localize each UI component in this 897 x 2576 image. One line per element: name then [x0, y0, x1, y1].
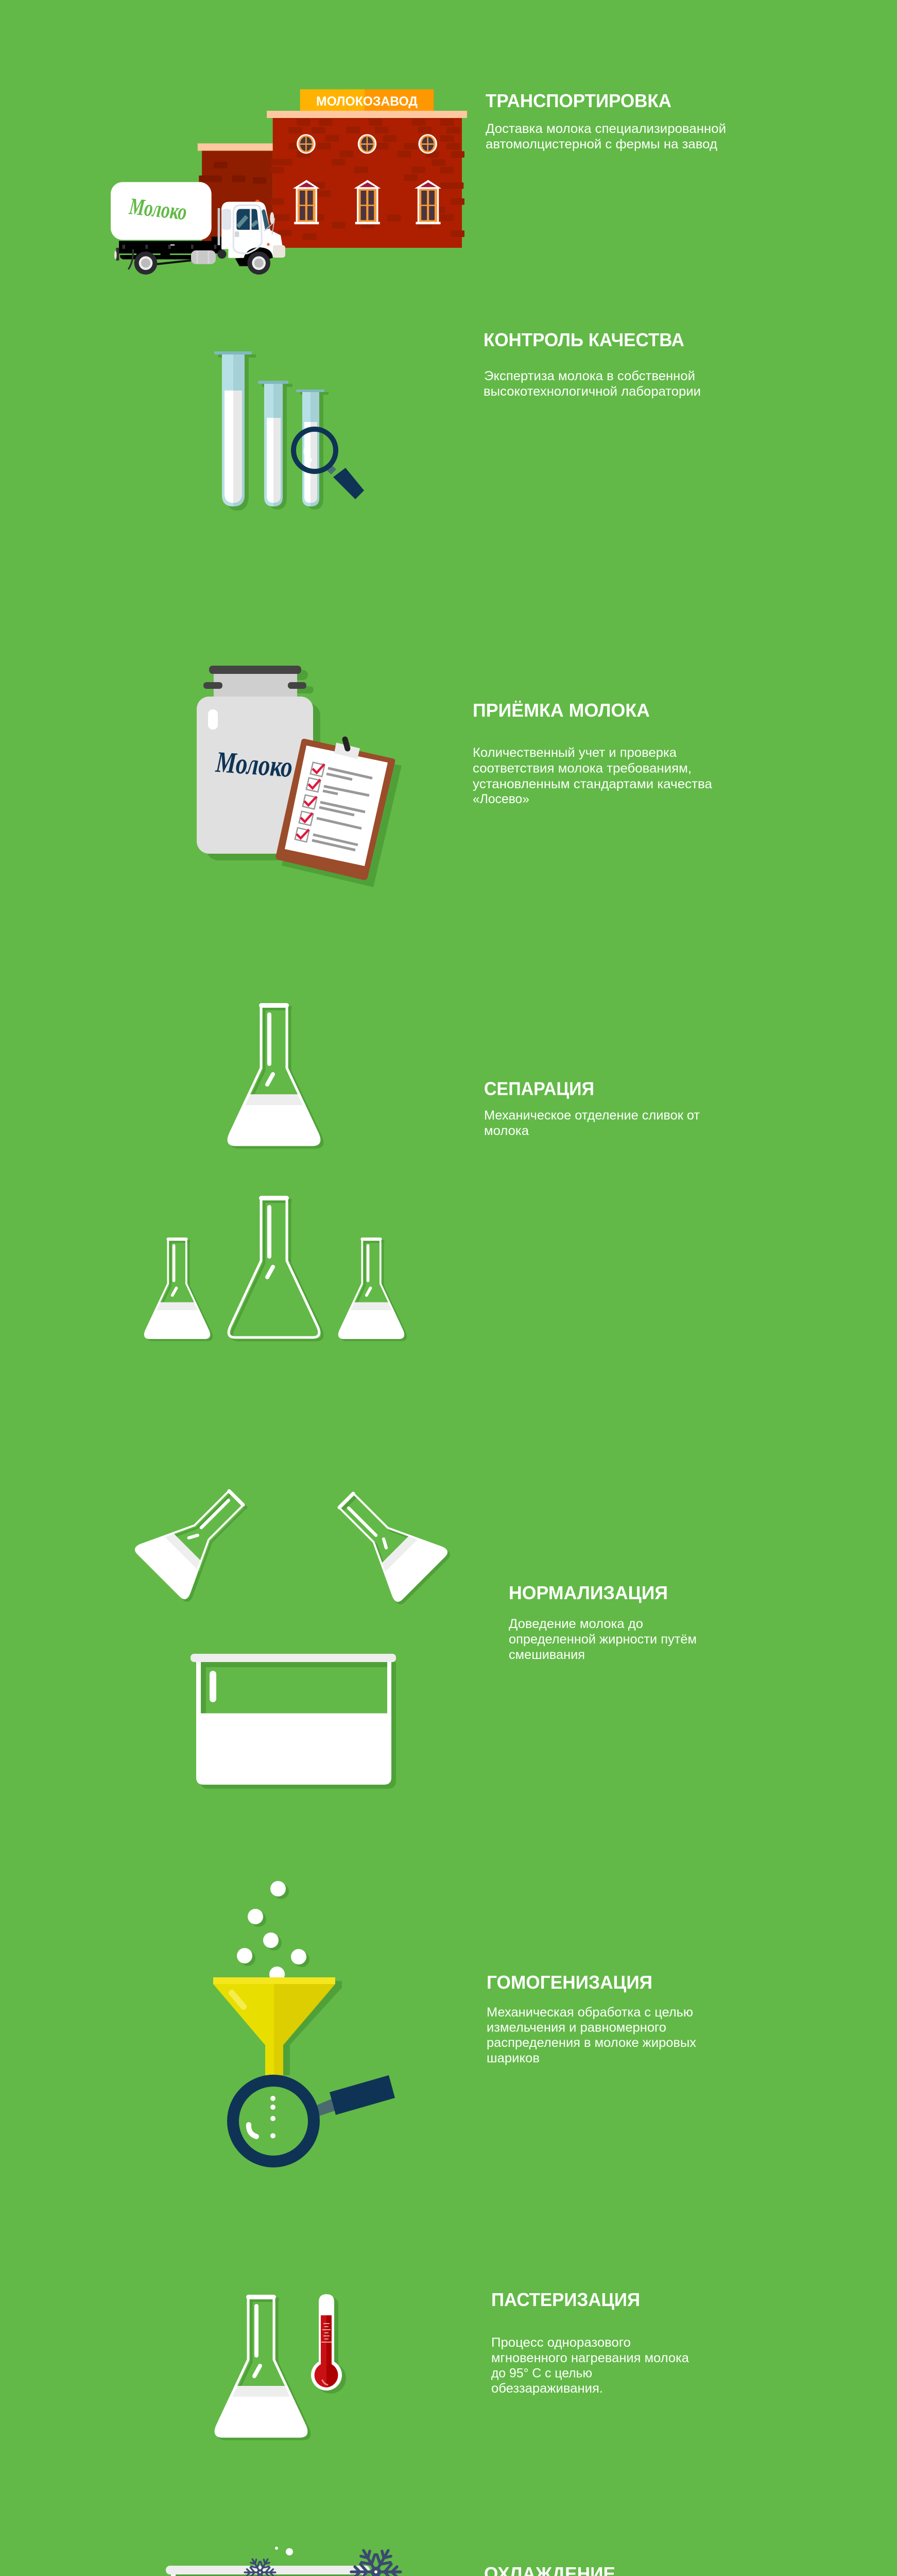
- text block: установленным стандартами качества: [473, 777, 712, 791]
- tube 3: [296, 389, 324, 506]
- text block: мгновенного нагревания молока: [491, 2351, 689, 2365]
- text block: Доведение молока до: [509, 1617, 643, 1631]
- flask: empty: [229, 1196, 322, 1340]
- text block: молока: [484, 1124, 529, 1138]
- text block: высокотехнологичной лаборатории: [484, 384, 701, 399]
- heading: ПРИЁМКА МОЛОКА: [473, 700, 650, 721]
- text block: автомолцистерной с фермы на завод: [486, 137, 717, 151]
- illustration: clipboard with checklist: [276, 739, 402, 887]
- panel: separation: [145, 1003, 700, 1340]
- text block: Механическое отделение сливок от: [484, 1108, 700, 1123]
- panel: transportation: [111, 89, 726, 275]
- heading: ГОМОГЕНИЗАЦИЯ: [487, 1972, 652, 1993]
- text block: «Лосево»: [473, 792, 529, 806]
- flask: small left: [145, 1238, 212, 1340]
- text block: Механическая обработка с целью: [487, 2005, 693, 2020]
- panel: pasteurization: [216, 2289, 689, 2439]
- flask with milk: [216, 2295, 309, 2439]
- flask: tilted left: [134, 1472, 265, 1602]
- flask: small right: [339, 1238, 406, 1340]
- text block: смешивания: [509, 1648, 585, 1662]
- illustration: dairy plant building: [198, 89, 467, 248]
- heading: ПАСТЕРИЗАЦИЯ: [491, 2289, 640, 2310]
- text block: [484, 1108, 700, 1138]
- text block: обеззараживания.: [491, 2381, 603, 2396]
- heading: КОНТРОЛЬ КАЧЕСТВА: [484, 329, 684, 350]
- text block: измельчения и равномерного: [487, 2021, 666, 2035]
- illustration: milk can: [197, 666, 320, 860]
- snow dots: [145, 2547, 396, 2576]
- text block: Процесс одноразового: [491, 2335, 631, 2350]
- text block: [487, 2005, 696, 2065]
- heading: СЕПАРАЦИЯ: [484, 1078, 594, 1099]
- text block: [484, 369, 701, 399]
- beaker: [166, 2566, 370, 2576]
- text block: Количественный учет и проверка: [473, 745, 677, 760]
- snowflakes: [160, 2547, 401, 2576]
- panel: quality control: [214, 329, 701, 511]
- flask: full: [229, 1003, 322, 1147]
- heading: ТРАНСПОРТИРОВКА: [486, 90, 671, 111]
- text block: определенной жирности путём: [509, 1632, 697, 1647]
- text block: шариков: [487, 2051, 540, 2065]
- thermometer: [311, 2294, 346, 2394]
- text block: до 95° С с целью: [491, 2366, 592, 2380]
- truck logo: Молоко: [128, 193, 188, 225]
- text block: распределения в молоке жировых: [487, 2036, 696, 2050]
- can logo: Молоко: [214, 745, 294, 784]
- text block: [473, 745, 712, 806]
- text block: [491, 2335, 689, 2396]
- text block: [509, 1617, 697, 1662]
- text block: Доставка молока специализированной: [486, 122, 726, 136]
- tube 2: [258, 381, 288, 506]
- beaker with milk: [191, 1654, 396, 1789]
- panel: homogenization: [213, 1881, 696, 2162]
- panel: normalization: [134, 1472, 697, 1789]
- shadows: [218, 354, 329, 511]
- funnel: [213, 1977, 342, 2075]
- text block: соответствия молока требованиям,: [473, 761, 692, 776]
- panel: cooling: [145, 2547, 628, 2576]
- heading: НОРМАЛИЗАЦИЯ: [509, 1582, 668, 1603]
- illustration: test tubes with magnifier: [214, 351, 364, 511]
- magnifier: [294, 429, 364, 499]
- text block: Экспертиза молока в собственной: [484, 369, 695, 383]
- panel: milk reception: [197, 666, 712, 887]
- magnifier: [233, 2075, 395, 2162]
- illustration: milk tanker truck: [111, 182, 285, 275]
- text block: [486, 122, 726, 151]
- tube 1: [214, 351, 252, 506]
- flask: tilted right: [320, 1475, 451, 1605]
- milk fat globules: [237, 1881, 309, 1982]
- factory sign: МОЛОКОЗАВОД: [316, 94, 418, 109]
